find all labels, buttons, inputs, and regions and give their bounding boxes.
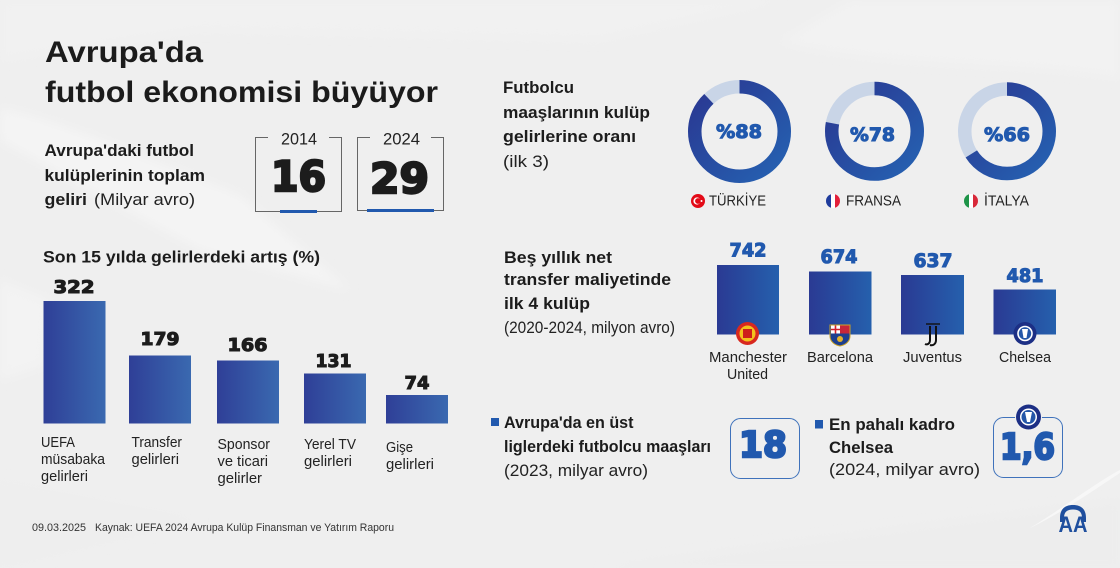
donut: İtalya 66%: %66 [984,124,1030,146]
bar chart: transfer spending: 637 [914,250,952,272]
stat box: 2024: 2024 [383,130,420,148]
footer: date and source: Kaynak: UEFA 2024 Avrupa Kulüp Finansman ve Yatırım Raporu [95,522,394,534]
bar chart: revenue growth: Transfer [132,434,182,451]
bar chart: transfer spending: 674 [820,246,858,268]
text block: net transfer spending [504,248,675,337]
stat box: 2014: 16 [271,152,326,201]
bar chart: revenue growth: Yerel TV [304,436,356,453]
icon: Chelsea crest [1014,322,1036,345]
donut: Türkiye 88% [695,87,784,176]
bar chart: transfer spending: 742 [730,240,766,262]
bar chart: transfer spending: 481 [1006,265,1044,287]
label: Türkiye [691,192,766,210]
bar chart: revenue growth: 179 [140,329,180,350]
bar chart: revenue growth: Sponsor [218,436,270,453]
icon: Barcelona crest [830,325,850,346]
bar chart: revenue growth: gelirleri [304,453,352,470]
text block: net transfer spending: Beş yıllık net [504,248,612,267]
stat box: 2024 [358,130,444,212]
bar chart: revenue growth: ve ticari [218,453,268,470]
text block: total revenue: geliri [44,190,87,209]
text block: wage ratio [503,78,650,171]
donut: Türkiye 88%: %88 [716,121,762,143]
bar chart: transfer spending: Manchester [709,349,787,366]
title: Avrupa'da [45,36,203,69]
stat: league wages: liglerdeki futbolcu maaşları [504,437,711,456]
bar chart: revenue growth: 131 [316,351,352,372]
label: İtalya [964,192,1029,208]
stat box: 2014: 2014 [281,130,317,148]
stat: most expensive squad: En pahalı kadro [829,415,955,434]
bar chart: revenue growth: gelirleri [132,451,179,468]
text block: total revenue: kulüplerinin toplam [44,166,205,185]
stat: most expensive squad: (2024, milyar avro) [829,460,980,479]
text block: wage ratio: maaşlarının kulüp [503,103,650,122]
text block: net transfer spending: transfer maliyetinde [504,270,671,289]
bar chart: revenue growth: Gişe [386,439,413,456]
label: Fransa: FRANSA [846,192,901,210]
icon: Juventus crest [925,324,940,345]
footer: date and source: 09.03.2025 [32,522,86,534]
bar chart: transfer spending: Juventus [903,349,962,366]
bar chart: revenue growth: UEFA [41,434,75,451]
label: İtalya: İTALYA [984,192,1029,210]
bar chart: revenue growth: gelirler [218,470,262,487]
text block: total revenue: (Milyar avro) [94,190,195,209]
bar chart: revenue growth: 322 [54,277,94,298]
bar chart: revenue growth [41,277,448,487]
donut: İtalya 66% [965,89,1049,174]
title [45,36,438,109]
text block: total revenue [44,141,205,209]
bar chart: revenue growth: 166 [228,335,268,356]
bar chart: revenue growth: 74 [404,373,430,394]
bar chart: revenue growth: müsabaka [41,451,106,468]
donut: Fransa 78%: %78 [850,124,895,146]
bar chart: transfer spending [709,240,1056,383]
title: futbol ekonomisi büyüyor [45,76,438,109]
label: Fransa [826,194,901,208]
text block: wage ratio: Futbolcu [503,78,574,97]
donut: Fransa 78% [832,89,917,174]
bar chart: transfer spending: Barcelona [807,349,874,366]
stat: most expensive squad: 1,6 [1000,427,1055,468]
bar chart: transfer spending: United [727,366,768,383]
text block: wage ratio: (ilk 3) [503,152,549,171]
icon: Manchester United crest [736,322,759,345]
stat: league wages [491,413,800,480]
logo: Anadolu Agency: AA [1058,512,1088,537]
text block: net transfer spending: (2020-2024, milyon avro) [504,319,675,337]
stat box: 2024: 29 [370,154,429,203]
stat: league wages: 18 [739,425,787,466]
stat: most expensive squad [815,415,1062,479]
text block: total revenue: Avrupa'daki futbol [44,141,194,160]
stat: most expensive squad: Chelsea [829,438,894,457]
bar chart: transfer spending: Chelsea [999,349,1052,366]
text block: net transfer spending: ilk 4 kulüp [504,294,590,313]
text block: wage ratio: gelirlerine oranı [503,127,636,146]
heading: revenue growth: Son 15 yılda gelirlerdeki artış (%) [43,248,320,266]
stat box: 2014 [256,130,342,213]
stat: league wages: Avrupa'da en üst [504,413,634,432]
stat: league wages: (2023, milyar avro) [504,461,648,480]
label: Türkiye: TÜRKİYE [709,192,766,210]
bar chart: revenue growth: gelirleri [386,456,434,473]
icon: Chelsea crest on squad box [1015,404,1042,430]
bar chart: revenue growth: gelirleri [41,468,88,485]
